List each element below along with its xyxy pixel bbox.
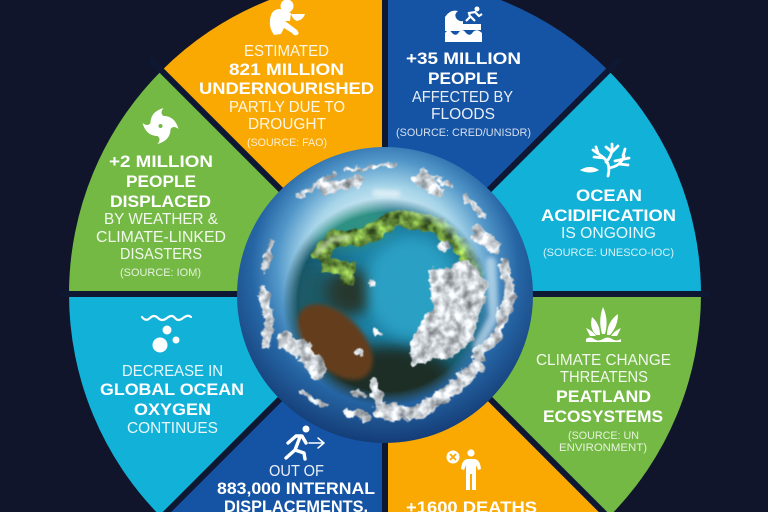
text: internal displacements: OUT OF — [269, 463, 324, 480]
panel: displaced people — [69, 71, 385, 294]
text: peatland — [536, 352, 671, 454]
text: displaced people: DISASTERS — [120, 246, 202, 263]
segment: orange top left — [162, 0, 385, 294]
icon: peatland reeds — [586, 307, 621, 342]
text: ocean oxygen: GLOBAL OCEAN — [100, 380, 244, 399]
icon: waves and bubbles — [142, 316, 191, 352]
text: undernourished: PARTLY DUE TO — [229, 99, 345, 116]
clouds — [263, 165, 510, 418]
text: ocean oxygen: CONTINUES — [127, 420, 218, 437]
segment: blue top right — [385, 0, 608, 294]
highlight: white cloud band — [376, 193, 494, 346]
segment: blue bottom left — [162, 294, 385, 512]
text: ocean acidification: (SOURCE: UNESCO-IOC) — [543, 247, 674, 259]
panel: ocean oxygen — [69, 294, 385, 512]
segment: cyan left lower — [69, 294, 385, 512]
panel: deaths — [385, 294, 608, 512]
text: undernourished — [199, 43, 374, 149]
panel: internal displacements — [162, 294, 385, 512]
icon: hurricane — [142, 108, 178, 144]
panel: floods — [385, 0, 608, 294]
text: floods: PEOPLE — [428, 69, 498, 88]
text: displaced people: (SOURCE: IOM) — [120, 267, 201, 279]
text: ocean acidification — [541, 186, 676, 259]
segment: green left upper — [69, 71, 385, 294]
icon: seated person with bowl — [270, 0, 305, 35]
text: floods — [396, 49, 531, 139]
text: undernourished: (SOURCE: FAO) — [247, 137, 327, 149]
segment: cyan right upper — [385, 71, 701, 294]
text: ocean acidification: IS ONGOING — [561, 225, 656, 242]
text: peatland: CLIMATE CHANGE — [536, 352, 671, 369]
text: internal displacements: 883,000 INTERNAL — [217, 479, 375, 498]
text: displaced people: BY WEATHER & — [104, 211, 218, 228]
text: ocean oxygen — [100, 363, 244, 437]
text: undernourished: ESTIMATED — [244, 43, 329, 60]
text: peatland: ECOSYSTEMS — [543, 407, 663, 426]
text: ocean oxygen: DECREASE IN — [122, 363, 223, 380]
text: ocean oxygen: OXYGEN — [134, 400, 211, 419]
illustration: globe — [237, 147, 533, 443]
segment: orange bottom right — [385, 294, 608, 512]
planet surface — [283, 198, 491, 410]
text: peatland: (SOURCE: UN — [568, 430, 639, 442]
panel: ocean acidification — [385, 71, 701, 294]
icon: person walking with arrow — [286, 426, 324, 459]
segment: green right lower — [385, 294, 701, 512]
text: floods: (SOURCE: CRED/UNISDR) — [396, 127, 531, 139]
text: peatland: THREATENS — [560, 369, 648, 386]
panel: undernourished — [162, 0, 385, 294]
text: floods: +35 MILLION — [406, 49, 521, 68]
text: floods: FLOODS — [431, 106, 495, 123]
text: internal displacements — [217, 463, 375, 512]
text: peatland: PEATLAND — [556, 387, 651, 406]
text: ocean acidification: ACIDIFICATION — [541, 206, 676, 225]
panel: peatland — [385, 294, 701, 512]
text: displaced people: DISPLACED — [110, 192, 211, 211]
icon: coral and fish — [581, 144, 629, 176]
text: displaced people: +2 MILLION — [109, 152, 213, 171]
text: displaced people — [96, 152, 226, 279]
text: peatland: ENVIRONMENT) — [559, 442, 647, 454]
text: undernourished: UNDERNOURISHED — [199, 79, 374, 98]
text: displaced people: PEOPLE — [126, 172, 196, 191]
globe atmosphere — [237, 147, 533, 443]
text: undernourished: DROUGHT — [248, 116, 326, 133]
text: floods: AFFECTED BY — [412, 89, 513, 106]
text: undernourished: 821 MILLION — [229, 60, 344, 79]
text: displaced people: CLIMATE-LINKED — [96, 229, 226, 246]
text: ocean acidification: OCEAN — [576, 186, 642, 205]
icon: flood with running person — [445, 6, 482, 42]
icon: person with cross — [446, 449, 481, 490]
